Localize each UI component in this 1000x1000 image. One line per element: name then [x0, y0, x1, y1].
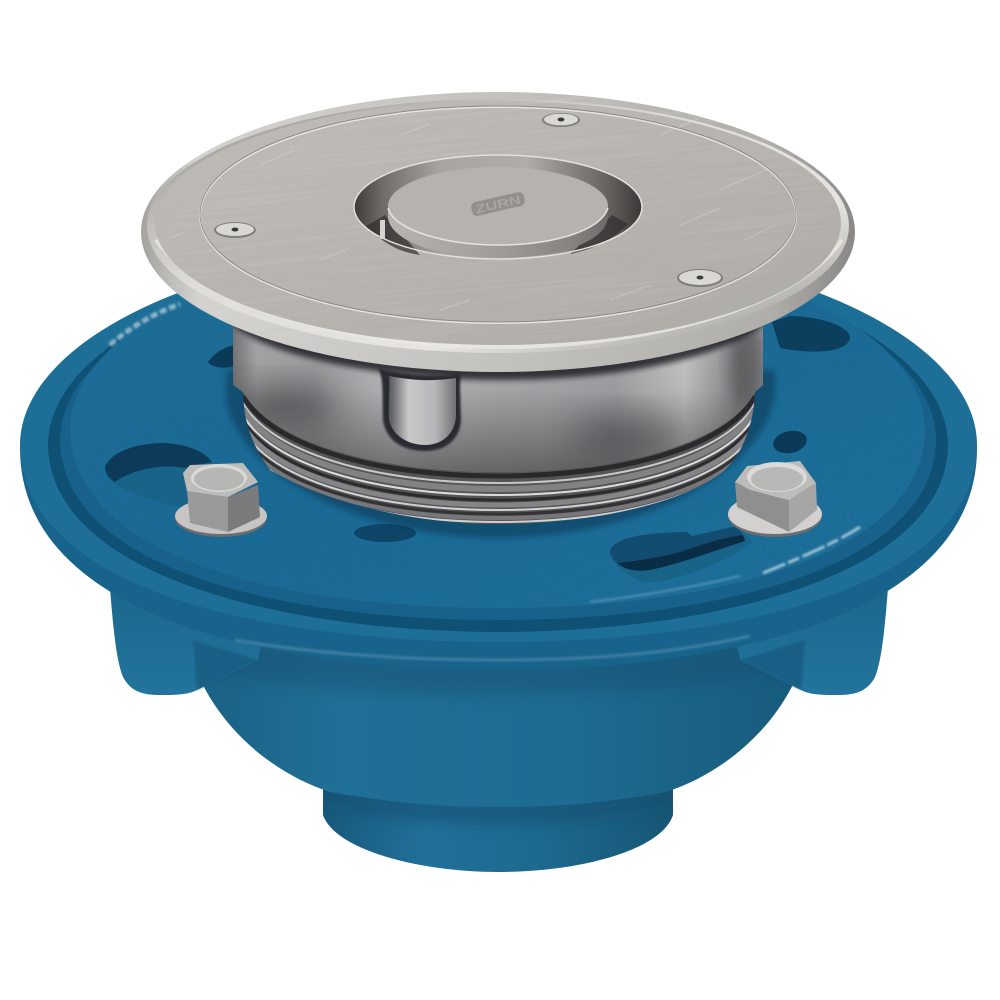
cap [388, 206, 608, 258]
right lug [728, 560, 893, 695]
plate top [155, 101, 841, 345]
threaded collar [243, 392, 755, 524]
slot: small right [771, 428, 809, 456]
inner plate seam [200, 107, 796, 323]
slot: small left [208, 345, 236, 368]
slot: left [105, 443, 215, 512]
screw: right [677, 269, 723, 287]
plate bevel [147, 99, 849, 353]
sleeve [230, 320, 766, 475]
outer flange rim [20, 240, 977, 670]
brushed scratches [170, 118, 775, 310]
outlet pipe [323, 790, 673, 872]
logo [470, 191, 526, 217]
screw: top [542, 113, 580, 127]
bowl body [204, 646, 792, 807]
bolt: left [175, 463, 267, 537]
sleeve shadow [226, 370, 775, 538]
plate edge [141, 92, 855, 372]
illustration: floor drain [20, 92, 977, 872]
slot: right [610, 526, 752, 583]
slot: small front [354, 524, 416, 542]
centre well [354, 155, 642, 259]
logo: ZURN [474, 192, 522, 216]
screw: left [214, 222, 256, 238]
mounting disc [70, 240, 925, 608]
left lug [105, 560, 270, 695]
bolt: right [728, 461, 822, 537]
sleeve notch [378, 368, 461, 451]
slot: top right [772, 316, 850, 352]
cover plate [141, 66, 855, 380]
